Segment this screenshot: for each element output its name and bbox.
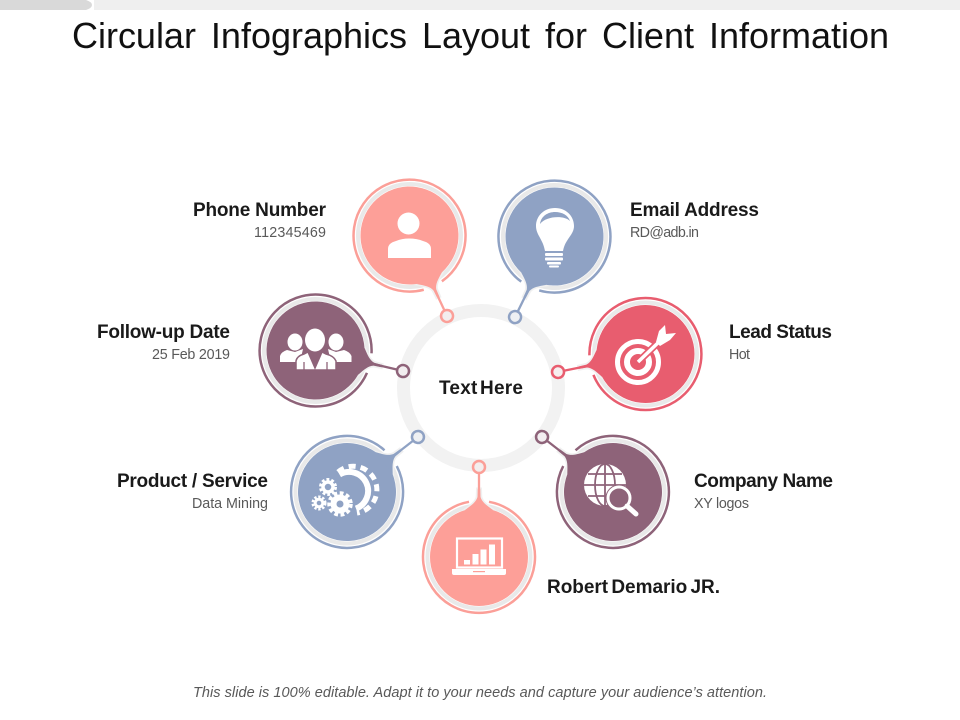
label: email address: Email Address (630, 200, 759, 221)
icon: target (618, 325, 676, 382)
label: follow-up date: 25 Feb 2019 (152, 347, 230, 363)
bubble: company name (503, 389, 691, 571)
icon: person (388, 212, 431, 258)
label: follow-up date: Follow-up Date (97, 322, 230, 343)
center label: Text Here (439, 378, 523, 399)
bubble: email address (462, 162, 629, 347)
icon: team (280, 328, 352, 370)
title: Circular Infographics Layout for Client Information (72, 15, 889, 56)
label: product / service: Product / Service (117, 471, 268, 492)
label: lead status: Hot (729, 347, 750, 363)
label: robert demario: Robert Demario JR. (547, 577, 720, 598)
label: lead status (729, 322, 832, 363)
central ring (404, 310, 558, 466)
icon: gears (313, 466, 377, 515)
label: email address: RD@adb.in (630, 225, 699, 241)
label: company name (694, 471, 833, 512)
label: email address (630, 200, 759, 241)
footer note: This slide is 100% editable. Adapt it to your needs and capture your audience’s attention. (193, 685, 767, 701)
label: phone number: Phone Number (193, 200, 327, 221)
icon: laptop with bars (452, 538, 506, 575)
label: phone number (193, 200, 327, 241)
bubble: phone number (335, 161, 500, 345)
label: product / service: Data Mining (192, 496, 268, 512)
icon: light bulb (536, 208, 574, 268)
label: phone number: 112345469 (254, 225, 326, 241)
top progress bar (0, 0, 960, 10)
label: follow-up date (97, 322, 230, 363)
label: company name: Company Name (694, 471, 833, 492)
label: product / service (117, 471, 268, 512)
label: company name: XY logos (694, 496, 749, 512)
bubble: lead status (541, 288, 712, 428)
icon: globe with magnifier (584, 464, 636, 514)
label: lead status: Lead Status (729, 322, 832, 343)
bubble: product / service (269, 389, 457, 571)
bubble: robert demario (423, 461, 535, 613)
bubble: follow-up date (248, 283, 422, 427)
